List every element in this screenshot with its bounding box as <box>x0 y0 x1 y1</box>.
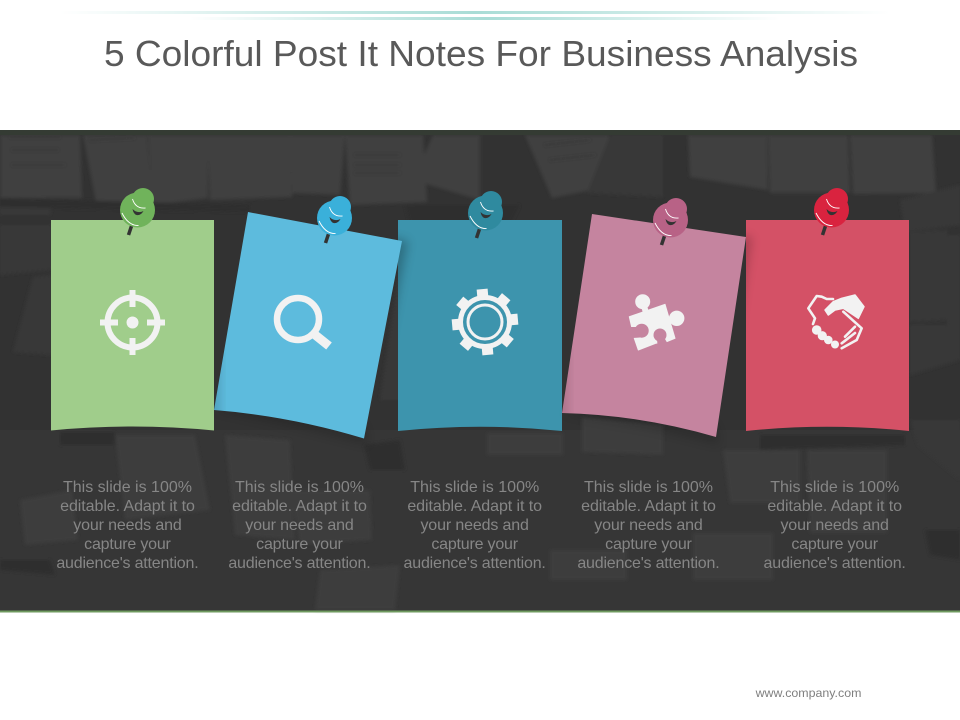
panel: dark post-it wall background <box>0 130 960 612</box>
text block: note 1 caption: editable. Adapt it to <box>60 498 195 515</box>
text block: note 1 caption: audience's attention. <box>56 555 199 572</box>
text block: note 3 caption: capture your <box>431 536 519 553</box>
title: 5 Colorful Post It Notes For Business Analysis <box>104 33 858 74</box>
panel: note 1 green <box>51 220 214 430</box>
text block: note 2 caption: This slide is 100% <box>235 479 364 496</box>
text block: note 3 caption: audience's attention. <box>404 555 546 572</box>
text block: note 4 caption: This slide is 100% <box>584 479 713 496</box>
icon: magnifier <box>277 298 329 346</box>
text block: note 5 caption: your needs and <box>780 517 889 534</box>
panel: note 3 teal <box>398 220 562 431</box>
icon: gear <box>449 286 521 358</box>
text block: note 2 caption: capture your <box>256 536 344 553</box>
text block: note 5 caption <box>764 479 906 572</box>
text block: note 3 caption: your needs and <box>420 517 529 534</box>
footer website: www.company.com <box>755 686 861 700</box>
icon: pink pin <box>653 198 688 245</box>
icon: green pin <box>120 188 155 235</box>
icon: teal pin <box>468 191 503 238</box>
panel: note 4 pink <box>562 214 755 437</box>
text block: note 2 caption: audience's attention. <box>228 555 371 572</box>
text block: note 1 caption: This slide is 100% <box>63 479 192 496</box>
text block: note 5 caption: This slide is 100% <box>770 479 899 496</box>
text block: note 1 caption <box>56 479 199 572</box>
icon: target <box>100 290 165 355</box>
text block: note 4 caption: audience's attention. <box>577 555 720 572</box>
icon: blue pin <box>317 196 352 243</box>
text block: note 2 caption <box>228 479 371 572</box>
text block: note 5 caption: audience's attention. <box>764 555 906 572</box>
text block: note 2 caption: your needs and <box>245 517 354 534</box>
text block: note 4 caption: editable. Adapt it to <box>581 498 716 515</box>
icon: red pin <box>814 188 849 235</box>
text block: note 2 caption: editable. Adapt it to <box>232 498 367 515</box>
panel: note 5 red <box>746 220 909 431</box>
top decorative gradient band <box>60 11 890 20</box>
text block: note 3 caption: editable. Adapt it to <box>407 498 542 515</box>
text block: note 3 caption: This slide is 100% <box>410 479 539 496</box>
text block: note 3 caption <box>404 479 546 572</box>
icon: handshake <box>808 295 864 348</box>
text block: note 1 caption: capture your <box>84 536 172 553</box>
text block: note 1 caption: your needs and <box>73 517 182 534</box>
icon: puzzle piece <box>628 294 684 350</box>
text block: note 5 caption: editable. Adapt it to <box>767 498 902 515</box>
text block: note 4 caption <box>577 479 720 572</box>
text block: note 4 caption: your needs and <box>594 517 703 534</box>
text block: note 4 caption: capture your <box>605 536 693 553</box>
text block: note 5 caption: capture your <box>791 536 879 553</box>
panel: note 2 blue <box>214 212 411 438</box>
